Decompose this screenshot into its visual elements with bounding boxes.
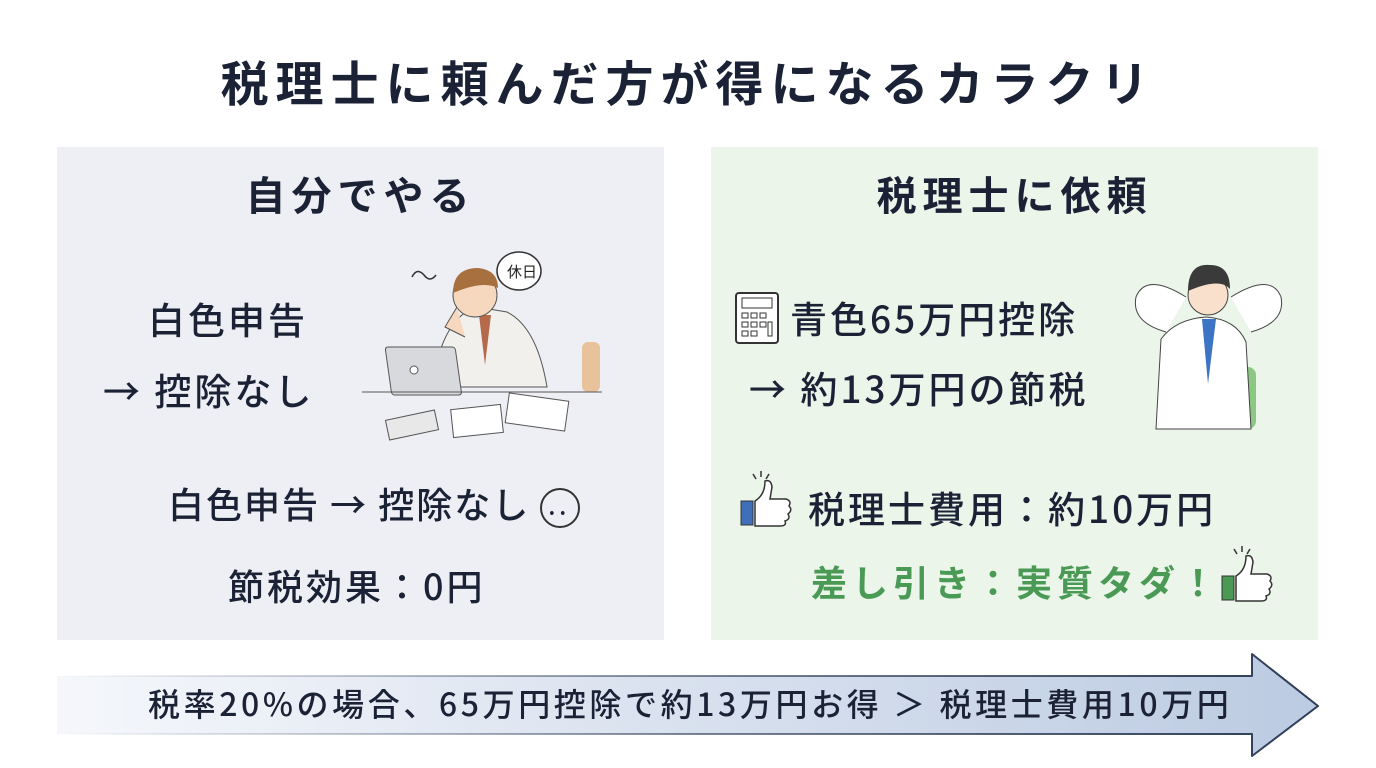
text: no deduction: → 控除なし [103, 362, 314, 416]
text: fee: 税理士費用：約10万円 [808, 480, 1216, 534]
illustration: stressed man: 休日 [507, 261, 537, 282]
icon: calculator [735, 292, 779, 344]
arrow: conclusion [57, 653, 1319, 757]
text: summary: 白色申告 → 控除なし [168, 477, 530, 529]
text: blue return: 青色65万円控除 [790, 290, 1078, 344]
text: summary: •• [549, 502, 571, 522]
panel: tax accountant [711, 147, 1318, 640]
text: savings: → 約13万円の節税 [749, 360, 1089, 414]
illustration: relaxed man [1134, 264, 1282, 430]
text: effect zero: 節税効果：0円 [228, 559, 486, 611]
panel: self [57, 147, 664, 640]
text: net free: 差し引き：実質タダ！ [811, 555, 1221, 607]
icon: thumbs up blue [740, 471, 792, 527]
illustration: stressed man [362, 251, 602, 441]
heading: self: 自分でやる [246, 164, 476, 222]
heading: accountant: 税理士に依頼 [876, 164, 1152, 222]
icon: thumbs up green [1222, 546, 1272, 602]
title: 税理士に頼んだ方が得になるカラクリ [220, 45, 1156, 115]
text: white return: 白色申告 [148, 291, 308, 345]
text: conclusion: 税率20%の場合、65万円控除で約13万円お得 ＞ 税理士費用10万円 [148, 680, 1232, 726]
